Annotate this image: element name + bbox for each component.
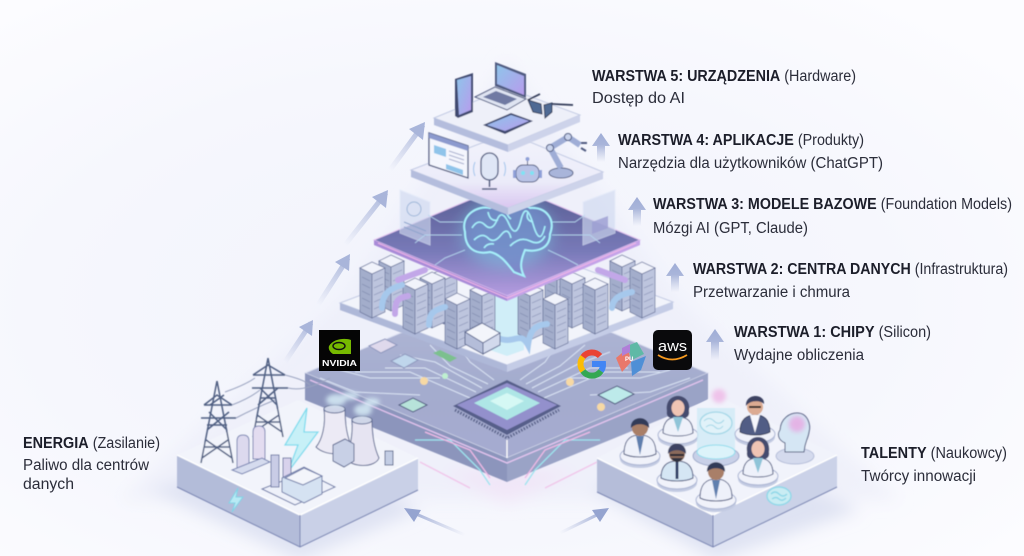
icon: silos bbox=[232, 426, 270, 474]
arrow: layer 4 up bbox=[592, 133, 610, 162]
text: layer 3 label: Mózgi AI (GPT, Claude) bbox=[653, 220, 808, 237]
icon: bolt on side bbox=[229, 488, 243, 512]
icon: substation building bbox=[262, 455, 335, 505]
circuit lines around brain bbox=[415, 215, 600, 265]
panel: energy block bbox=[177, 358, 418, 547]
panel: layer 2 data centers plate bbox=[340, 240, 673, 372]
text: layer 2 label: WARSTWA 2: CENTRA DANYCH (Infrastruktura) bbox=[693, 261, 1008, 278]
icon: smartphone bbox=[455, 73, 473, 118]
icon: brain on talent block side bbox=[767, 487, 791, 505]
text: layer 3 label bbox=[653, 196, 1012, 237]
logo: multicolour cube bbox=[616, 342, 646, 376]
icon: scientist 6 bbox=[696, 462, 736, 512]
text: layer 1 label: Wydajne obliczenia bbox=[734, 347, 864, 364]
text: energy label: danych bbox=[23, 476, 74, 493]
text: layer 1 label bbox=[734, 324, 931, 364]
logo: NVIDIA bbox=[319, 330, 360, 371]
glowing edge traces bbox=[310, 380, 703, 488]
icon: robot arm bbox=[546, 134, 587, 178]
icon: smart glasses bbox=[528, 94, 573, 118]
icon: app window bbox=[429, 133, 468, 178]
cooling unit bbox=[465, 323, 500, 354]
text: layer 4 label: Narzędzia dla użytkowników (ChatGPT) bbox=[618, 155, 883, 172]
text: layer 5 label: WARSTWA 5: URZĄDZENIA (Hardware) bbox=[592, 68, 856, 85]
text: layer 1 label: WARSTWA 1: CHIPY (Silicon) bbox=[734, 324, 931, 341]
panel: layer 5 devices plate bbox=[434, 62, 580, 152]
text: energy label: Paliwo dla centrów bbox=[23, 457, 150, 474]
arrow: from energy block bbox=[404, 508, 465, 535]
text: energy label: ENERGIA (Zasilanie) bbox=[23, 435, 160, 452]
hologram panel left bbox=[400, 190, 430, 245]
text: layer 3 label: WARSTWA 3: MODELE BAZOWE (Foundation Models) bbox=[653, 196, 1012, 213]
logo: multicolour cube: PU bbox=[625, 357, 633, 363]
text: energy label bbox=[23, 435, 160, 493]
icon: lightning bolt bbox=[285, 408, 318, 472]
text: layer 5 label bbox=[592, 68, 856, 107]
soft glow behind the pyramid bbox=[120, 60, 900, 556]
text: layer 5 label: Dostęp do AI bbox=[592, 90, 685, 107]
icon: pylon right bbox=[252, 358, 330, 437]
server racks right bbox=[518, 255, 655, 349]
icon: glowing brain bbox=[461, 196, 553, 276]
arrow: growth arrows along the left edge bbox=[285, 122, 425, 362]
arrow: from talent block bbox=[560, 508, 609, 533]
icon: head with brain bbox=[776, 413, 814, 464]
light column bbox=[490, 290, 524, 356]
icon: robot bbox=[513, 157, 542, 182]
logo: NVIDIA: NVIDIA bbox=[322, 359, 357, 368]
icon: scientist 2 bbox=[658, 396, 698, 447]
panel: layer 4 applications plate bbox=[411, 133, 603, 215]
arrow: layer 3 up bbox=[628, 197, 646, 226]
text: layer 4 label: WARSTWA 4: APLIKACJE (Produkty) bbox=[618, 132, 864, 149]
text: talent label bbox=[861, 445, 1007, 485]
text: talent label: Twórcy innowacji bbox=[861, 468, 976, 485]
text: layer 2 label: Przetwarzanie i chmura bbox=[693, 284, 850, 301]
icon: scientist 3 bbox=[735, 396, 775, 446]
icon: laptop bbox=[475, 62, 526, 110]
icon: hologram cylinder with brain bbox=[693, 389, 739, 466]
arrow: layer 2 up bbox=[666, 263, 684, 292]
text: talent label: TALENTY (Naukowcy) bbox=[861, 445, 1007, 462]
chip components bbox=[369, 339, 397, 353]
panel: layer 1 chips plate bbox=[305, 288, 708, 488]
icon: scientist 5 bbox=[738, 437, 778, 488]
icon: microphone bbox=[474, 153, 506, 189]
logo: Google bbox=[580, 352, 603, 376]
logo: AWS: aws bbox=[658, 338, 687, 355]
icon: pylon left bbox=[201, 378, 275, 463]
main processor chip bbox=[453, 380, 561, 438]
hologram panel right bbox=[583, 190, 615, 245]
logo: AWS bbox=[653, 330, 692, 370]
text: layer 4 label bbox=[618, 132, 883, 172]
steam bbox=[326, 392, 380, 416]
text: layer 2 label bbox=[693, 261, 1008, 301]
icon: scientist 4 bbox=[657, 444, 697, 492]
arrow: layer 1 up bbox=[706, 329, 724, 360]
icon: tablet bbox=[483, 113, 533, 134]
circuit traces bbox=[320, 340, 690, 398]
icon: scientist 1 bbox=[620, 418, 660, 468]
panel: layer 3 foundation models plate bbox=[374, 184, 640, 301]
icon: cooling towers bbox=[316, 405, 393, 467]
cooling pipes bbox=[382, 270, 632, 345]
server racks left bbox=[360, 255, 495, 349]
panel: talent block bbox=[597, 389, 837, 547]
